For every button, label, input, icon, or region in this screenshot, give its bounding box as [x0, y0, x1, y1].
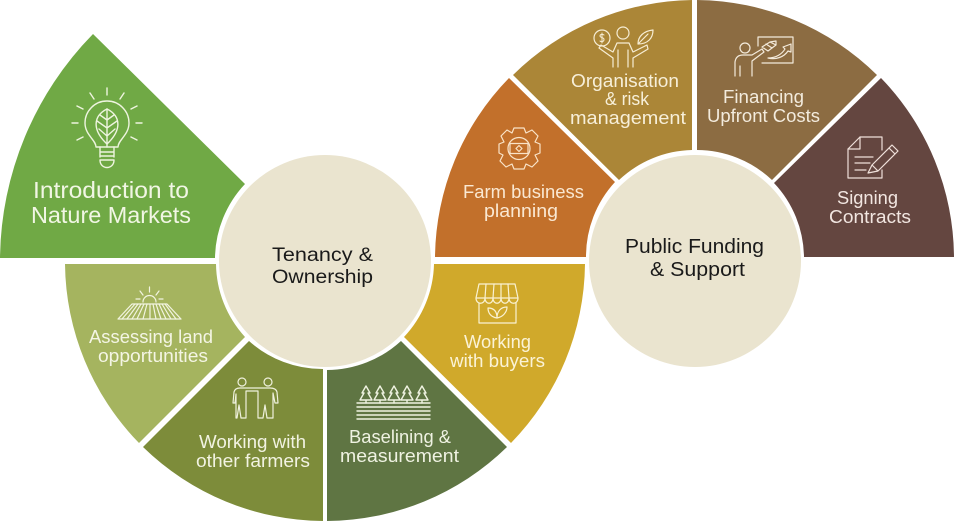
label: introduction: Introduction to [33, 177, 189, 203]
panel: Working with other farmers [143, 341, 323, 521]
label: baselining [340, 427, 459, 466]
label: farm business: planning [484, 201, 558, 221]
icon: presenter with money chart [735, 37, 793, 76]
label: introduction [31, 177, 191, 228]
hub label: public funding: Public Funding [625, 236, 764, 258]
hub label: public funding: & Support [650, 259, 745, 281]
hub label: tenancy: Ownership [272, 266, 373, 288]
icon: two farmers carrying [233, 378, 278, 418]
label: signing: Signing [837, 188, 898, 208]
label: signing [829, 188, 911, 227]
label: assessing land: opportunities [98, 346, 208, 366]
sector shape: organisation [513, 0, 692, 180]
label: farm business [463, 182, 584, 221]
hub label: tenancy: Tenancy & [272, 244, 373, 266]
panel: Baselining & measurement [327, 341, 507, 521]
sector shape: introduction [0, 34, 245, 258]
label: baselining: Baselining & [349, 427, 451, 447]
label: buyers: with buyers [449, 351, 545, 371]
icon: trees over field rows [357, 386, 430, 419]
icon: sun over field [118, 287, 181, 319]
panel: Working with buyers [404, 264, 585, 443]
icon: light bulb with leaf [72, 88, 142, 168]
icon: person balancing coin and leaf [594, 27, 653, 67]
sector shape: other farmers [143, 341, 323, 521]
sector shape: buyers [404, 264, 585, 443]
label: organisation: Organisation [571, 71, 679, 91]
label: assessing land: Assessing land [89, 327, 213, 347]
hub label: tenancy [272, 244, 373, 288]
label: introduction: Nature Markets [31, 202, 191, 228]
label: financing [707, 87, 820, 126]
label: baselining: measurement [340, 446, 459, 466]
label: organisation: management [570, 108, 686, 128]
hub: Tenancy & Ownership [219, 155, 431, 367]
sector shape: baselining [327, 341, 507, 521]
sector shape: signing [774, 78, 954, 257]
hub circle: tenancy [219, 155, 431, 367]
panel: Signing Contracts [774, 78, 954, 257]
hub label: public funding [625, 236, 764, 281]
sector shape: farm business [435, 78, 615, 257]
icon: gear with banknote [499, 128, 540, 169]
label: other farmers [196, 432, 310, 471]
label: organisation [570, 71, 686, 128]
label: farm business: Farm business [463, 182, 584, 202]
label: buyers [449, 332, 545, 371]
panel: Farm business planning [435, 78, 615, 257]
label: financing: Upfront Costs [707, 106, 820, 126]
icon: document and pencil [848, 137, 898, 178]
hub circle: public funding [589, 155, 801, 367]
panel: Introduction to Nature Markets [0, 34, 245, 258]
label: assessing land [89, 327, 213, 366]
label: signing: Contracts [829, 207, 911, 227]
label: other farmers: Working with [199, 432, 306, 452]
panel: Financing Upfront Costs [697, 0, 877, 180]
panel: Organisation & risk management [513, 0, 692, 180]
label: other farmers: other farmers [196, 451, 310, 471]
label: buyers: Working [464, 332, 531, 352]
sector shape: assessing land [65, 264, 245, 443]
sector shape: financing [697, 0, 877, 180]
panel: Assessing land opportunities [65, 264, 245, 443]
icon: market stall with plant [476, 284, 518, 323]
hub: Public Funding & Support [589, 155, 801, 367]
label: organisation: & risk [605, 89, 650, 109]
label: financing: Financing [723, 87, 804, 107]
